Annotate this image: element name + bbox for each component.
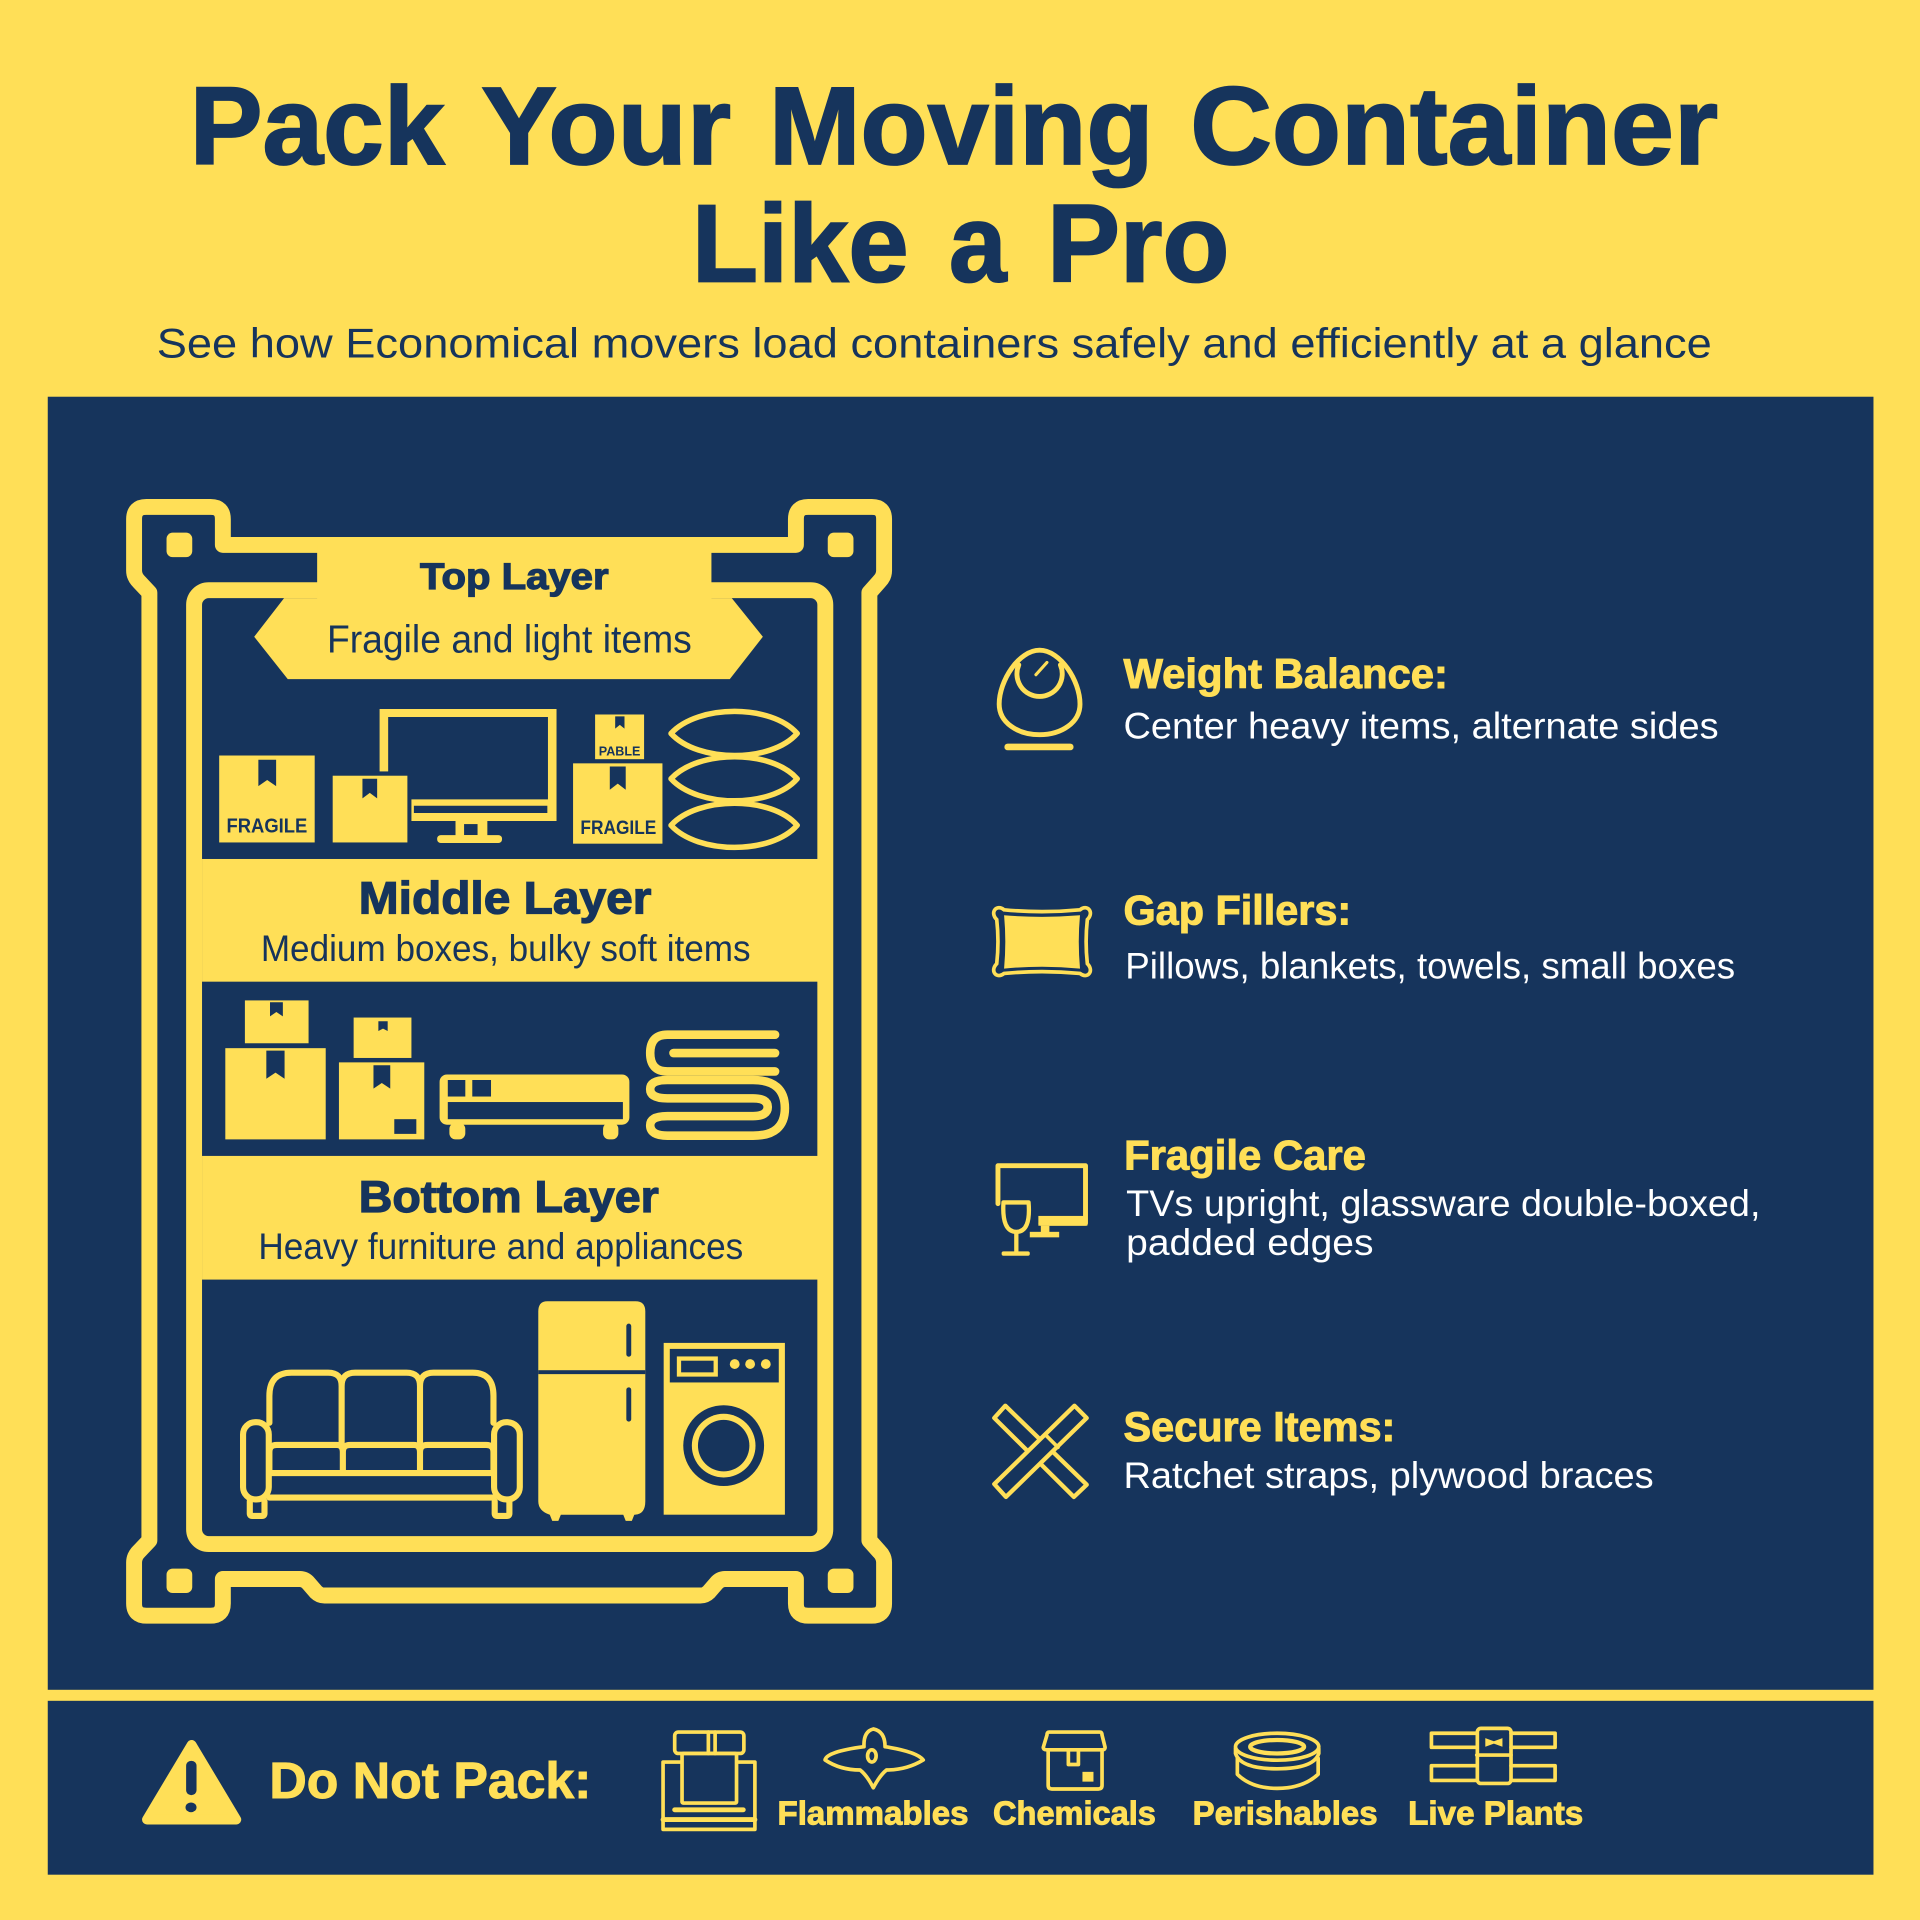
item: perishables [1193,1733,1378,1832]
item: perishables: Perishables [1193,1795,1378,1832]
box: fragile right [573,763,662,844]
icon: warning triangle [147,1745,236,1820]
box: fragile left: FRAGILE [227,816,307,838]
tip: gap fillers [994,886,1735,986]
box: in front of monitor [328,771,411,845]
tip: fragile care: padded edges [1126,1222,1374,1263]
box: fragile left [219,756,315,842]
tip: weight balance: Center heavy items, alternate sides [1123,705,1719,746]
title: a [949,183,1007,306]
item: flammables [778,1729,969,1832]
title [190,65,1718,306]
top layer banner: Top Layer [420,556,609,597]
icon: strapped rack [1431,1728,1555,1783]
refrigerator [538,1301,645,1521]
corner fittings [167,533,853,1593]
tip: fragile care: Fragile Care [1124,1131,1366,1178]
item: flammables: Flammables [778,1795,969,1832]
boxes stack A [225,1000,326,1139]
title: Moving [769,65,1153,188]
box: small stacked: PABLE [599,744,641,759]
title: Your [481,65,731,188]
panel: do not pack strip [48,1701,1873,1875]
icon: crossed straps [994,1406,1087,1497]
item: chemicals: Chemicals [993,1795,1156,1832]
bottom layer band [202,1156,818,1280]
subtitle: See how Economical movers load containers safely and efficiently at a glance [157,320,1712,367]
icon: tv and wine glass [998,1166,1087,1256]
icon: stacked round tins [1236,1733,1319,1788]
icon: packed box stack [663,1732,755,1829]
top layer banner [254,545,763,679]
panel: main navy panel [48,397,1873,1690]
icon: chemicals box [1043,1732,1105,1789]
item: live plants: Live Plants [1408,1795,1583,1832]
stacked pillows [671,711,797,847]
do not pack heading: Do Not Pack: [269,1751,591,1809]
monitor [380,709,557,843]
middle layer band: Medium boxes, bulky soft items [261,928,751,969]
washing machine [664,1343,785,1515]
tip: gap fillers: Pillows, blankets, towels, small boxes [1125,945,1735,986]
tip: weight balance: Weight Balance: [1123,650,1448,697]
top layer items [219,709,797,847]
panel: container diagram [134,507,884,1616]
bed [440,1074,629,1139]
title: Container [1190,65,1718,188]
tip: secure items [994,1403,1654,1497]
tip: weight balance [999,650,1719,747]
icon: pillow [994,908,1090,976]
tip: fragile care: TVs upright, glassware double-boxed, [1126,1183,1760,1224]
tip: fragile care [998,1131,1760,1263]
tip: gap fillers: Gap Fillers: [1123,886,1351,933]
title: Pro [1047,183,1229,306]
bottom layer band: Heavy furniture and appliances [258,1226,743,1267]
item: chemicals [993,1732,1156,1832]
title: Like [692,183,909,306]
sofa [243,1373,520,1516]
middle layer band: Middle Layer [359,872,651,923]
icon: flammables [825,1729,923,1788]
bottom layer band: Bottom Layer [359,1173,659,1222]
boxes stack B [339,1018,424,1139]
box: small stacked [595,714,644,759]
tip: secure items: Ratchet straps, plywood braces [1123,1455,1654,1496]
box: fragile right: FRAGILE [580,817,656,839]
top layer banner: Fragile and light items [327,619,692,662]
middle layer items [225,1000,785,1139]
container outer frame [134,507,884,1616]
folded towels [650,1035,785,1136]
middle layer band [202,859,818,982]
tip: secure items: Secure Items: [1123,1403,1395,1450]
title: Pack [190,65,445,188]
bottom layer items [243,1301,785,1521]
item: live plants [1408,1728,1583,1832]
container inner frame [194,590,825,1544]
icon: scale [999,650,1080,747]
